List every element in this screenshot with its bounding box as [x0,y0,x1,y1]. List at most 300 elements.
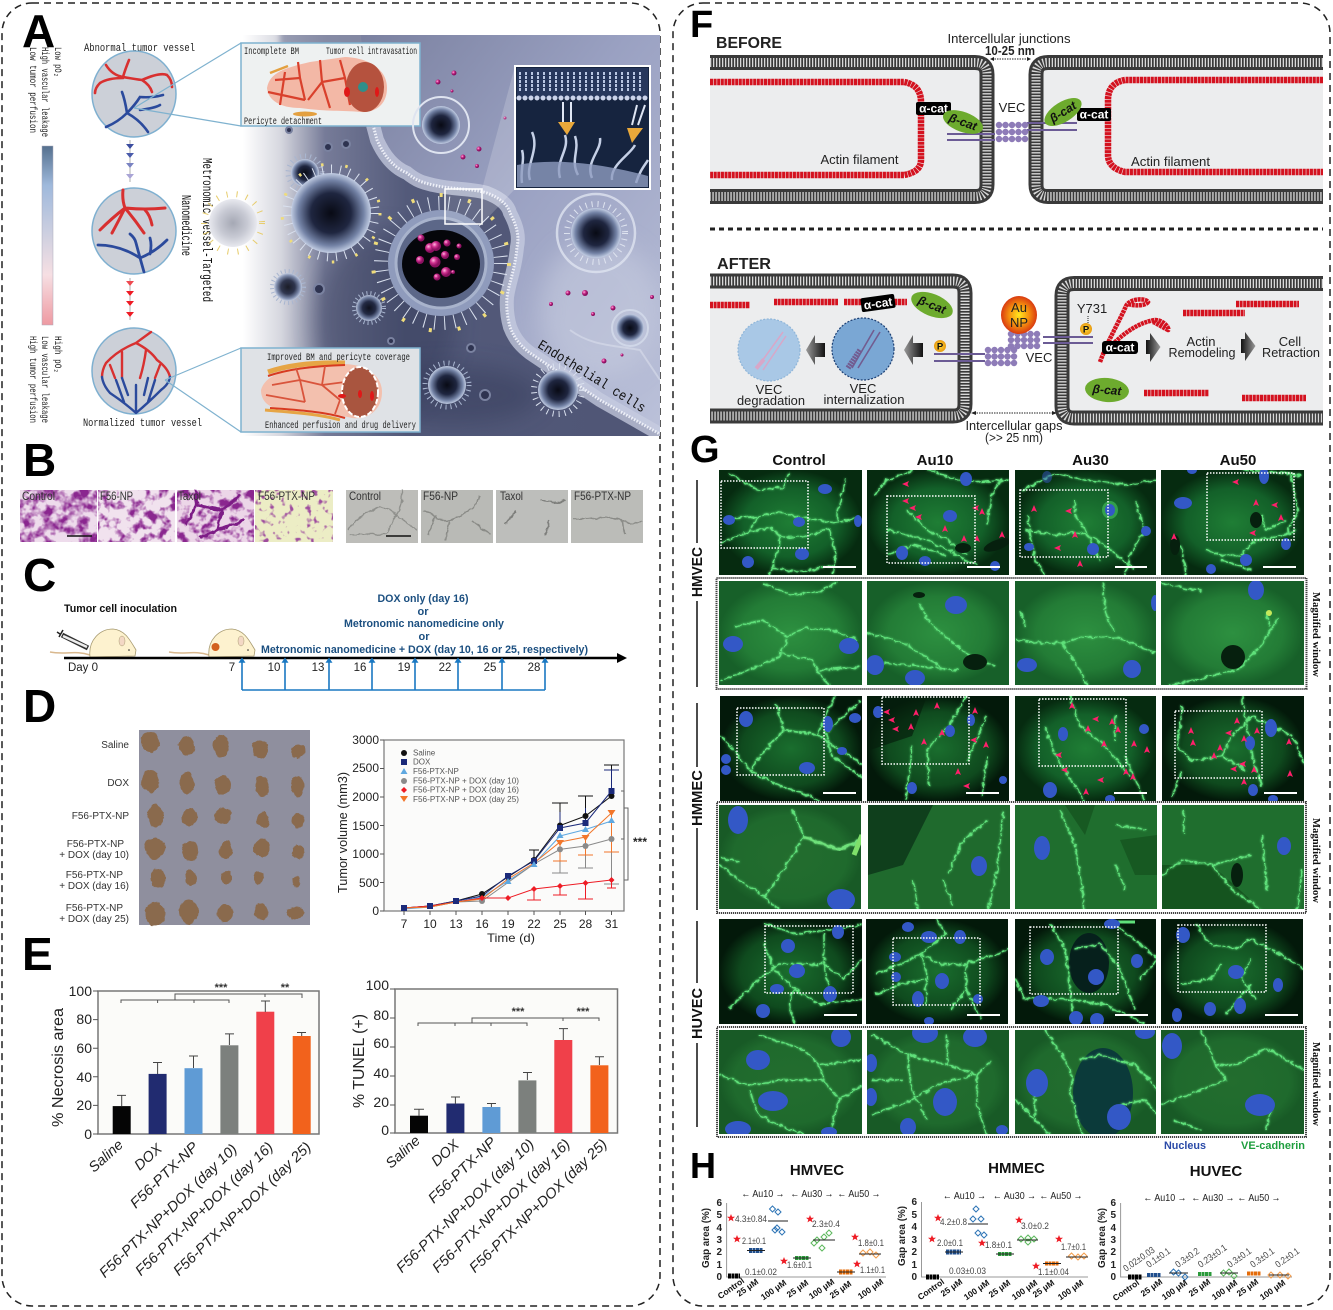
line chart: tumor volume: 19 [501,917,515,931]
scatter: HMMEC: 1 [911,1260,917,1271]
beta-catenin before right [1040,92,1086,132]
callout: abnormal vessel box [241,43,420,128]
micrograph: HMVEC Au30 [1015,470,1156,575]
micrograph: HUVEC Control [719,919,862,1024]
scatter: HUVEC: Control [1111,1277,1141,1303]
scatter: HUVEC: 0.2±0.1 [1273,1246,1302,1270]
arrow: to actin remodeling [1146,333,1160,362]
icon: abnormal vessel circle [92,51,176,137]
bar chart: necrosis area: F56-PTX-NP [127,1139,202,1212]
column headings: Au30 [1072,452,1109,469]
magnified window frame: HMVEC [716,578,1306,689]
bar chart: TUNEL: F56-PTX-NP+DOX (day 25) [467,1136,611,1276]
micrograph: gray Control [346,489,418,543]
micrograph: HUVEC Au30 [1015,919,1156,1024]
micrograph: HUVEC Au50 [1161,919,1303,1024]
bar chart: TUNEL [351,977,618,1276]
callout: abnormal vessel box: Incomplete BM [244,46,299,58]
scatter: HUVEC: 25 μM [1139,1276,1164,1298]
scatter: HUVEC: 25 μM [1187,1276,1212,1298]
scatter: HUVEC: 100 μM [1160,1277,1189,1302]
label: normalized vessel: Normalized tumor vessel [83,418,202,430]
scatter: HMVEC: ← Au30 → [790,1188,834,1200]
cell: after left [710,281,965,416]
magnified: HMMEC Control [719,805,861,909]
vertical condition text: bottom [26,336,63,423]
panel C: dosing timeline [23,549,627,690]
bar chart: necrosis area: 100 [69,983,92,999]
micrograph: gray F56-NP: F56-NP [423,489,458,503]
callout: abnormal vessel box: Tumor cell intravasation [326,46,417,58]
VEC internalization vesicle [824,318,904,407]
arrows: red progression [126,278,134,320]
arrow: internalization [904,335,923,365]
vertical condition text: top: Low tumor perfusion [26,47,38,133]
VEC strand right [1011,334,1093,365]
bar chart: necrosis area: DOX [132,1140,167,1174]
bar chart: TUNEL: DOX [429,1136,464,1170]
beta-catenin after left: β-cat [915,293,949,317]
legend: Saline [413,748,436,758]
bar chart: necrosis area: 40 [76,1069,92,1085]
panel G: VE-cadherin micrographs [689,429,1321,1152]
row label: HUVEC: HUVEC [689,988,706,1039]
line chart: tumor volume: 31 [605,917,618,931]
bar chart: necrosis area: F56-PTX-NP+DOX (day 16) [133,1139,277,1279]
dosing schedule text: Metronomic nanomedicine only [344,618,505,630]
scatter: HMMEC: ← Au30 → [993,1190,1036,1202]
bar chart: necrosis area: *** [215,982,228,994]
scatter: HMMEC: Gap area (%) [897,1206,908,1266]
scatter: HMMEC: 2 [911,1247,917,1258]
scatter: HMVEC: 2 [716,1247,722,1258]
line chart: tumor volume: Tumor volume (mm3) [335,772,350,893]
magnified: HUVEC Au30 [1015,1030,1156,1134]
label: magnified window 3: Magnified window [1310,1042,1321,1127]
scatter: HUVEC: 4 [1110,1223,1116,1234]
scatter: HUVEC: 2 [1110,1247,1116,1258]
scatter: HUVEC: 100 μM [1258,1277,1287,1302]
legend: F56-PTX-NP [413,767,459,776]
heading B: B [23,434,56,486]
nanoparticles in tumor [204,70,654,414]
tumor photo with group labels: DOX [107,778,129,789]
label: actin remodeling: Actin [1187,334,1215,349]
icon: Au nanoparticle: NP [1010,315,1028,330]
beta-catenin after left [907,287,957,323]
vertical condition text: bottom: Low vascular leakage [38,336,50,423]
scatter: HMMEC: 0 [911,1272,917,1283]
panel D: tumor photos and growth curve [23,680,647,945]
dosing schedule text: or [418,631,430,643]
zoom wedge [482,66,515,224]
line chart: tumor volume: 1000 [352,847,379,861]
icon: mouse with tumor [169,629,255,657]
bar chart: TUNEL: F56-PTX-NP+DOX (day 16) [430,1136,574,1276]
label: intercellular gaps: (>> 25 nm) [985,430,1043,445]
scatter: HUVEC [1097,1163,1302,1303]
scatter: HUVEC: 0.3±0.1 [1248,1246,1277,1270]
day labels: Day 0 [68,662,98,674]
beta-catenin after right [1084,376,1130,404]
dosing schedule text: or [418,606,429,618]
scatter: HMMEC: 100 μM [1010,1277,1039,1302]
bar chart: necrosis area: % Necrosis area [50,1008,67,1127]
scatter: HMVEC: 3 [716,1235,722,1246]
alpha-catenin before left: α-cat [919,102,948,116]
heading: after: AFTER [717,256,771,273]
scatter: HUVEC: 0.23±0.1 [1196,1243,1229,1270]
callout: normalized vessel box: Enhanced perfusion and drug delivery [265,420,416,432]
tumor photo with group labels: F56-PTX-NP [67,839,124,850]
legend: F56-PTX-NP + DOX (day 25) [413,795,519,804]
scatter: HMVEC: 1.1±0.1 [860,1265,885,1276]
day labels [68,662,540,674]
scatter: HMMEC: 25 μM [987,1277,1012,1299]
dosing schedule text: Metronomic nanomedicine + DOX (day 10, 16 or 25, respectively) [261,644,588,656]
vertical condition text: bottom: High pO₂ [51,336,63,373]
micrograph: HMMEC Au10 [867,696,1009,801]
tumor photo with group labels [59,730,310,926]
scatter: HMVEC: 100 μM [759,1277,788,1302]
line chart: tumor volume: 2500 [352,761,379,775]
micrograph: HMMEC Au30 [1015,696,1156,801]
bar chart: TUNEL: 40 [373,1065,389,1081]
bar chart: TUNEL: *** [512,1006,525,1018]
scatter: HMMEC: ← Au50 → [1040,1190,1082,1202]
column headings: Au50 [1220,452,1256,469]
bar chart: TUNEL: 20 [373,1094,389,1110]
magnified: HMMEC Au10 [868,805,1010,909]
label: intercellular gaps: Intercellular gaps [966,418,1063,433]
scatter: HMVEC: 2.1±0.1 [742,1236,766,1247]
panel F: junction mechanism [690,4,1323,445]
Y731 phosphorylation: Y731 [1077,301,1107,316]
tumor photo with group labels: F56-PTX-NP [66,870,123,881]
VEC junction complex: VEC [999,100,1025,115]
micrograph: purple F56-PTX-NP [255,489,333,542]
scatter: HMVEC: Control [716,1275,746,1301]
scatter: HMVEC: 100 μM [807,1276,836,1301]
VEC free strand with phosphate [934,340,1016,363]
bar chart: necrosis area: 20 [76,1097,92,1113]
magnified: HMVEC Control [719,581,862,685]
magnified: HMVEC Au50 [1161,581,1304,685]
line chart: tumor volume: Time (d) [487,931,535,945]
bar chart: necrosis area: F56-PTX-NP+DOX (day 25) [171,1139,315,1279]
scatter: HUVEC: 0.02±0.03 [1121,1245,1157,1274]
line chart: tumor volume: *** [633,835,647,849]
scatter: HUVEC: 25 μM [1235,1276,1260,1298]
line chart: tumor volume: 0 [372,904,379,918]
scatter: HMVEC: 1.8±0.1 [858,1238,884,1249]
scatter: HUVEC: 0.1±0.1 [1144,1246,1173,1270]
inset: ligand detail [515,66,650,189]
scatter: HMVEC: 1.6±0.1 [787,1260,812,1271]
micrograph: gray Control: Control [349,489,381,503]
micrograph: HMMEC Control [720,696,862,801]
day labels: 16 [354,662,366,674]
bar chart: necrosis area: Saline [86,1137,127,1176]
VEC junction complex [947,100,1077,140]
small selection square [445,189,482,224]
tumor photo with group labels: F56-PTX-NP [66,903,123,914]
panel E: bar charts [22,928,618,1281]
arrow: to cell retraction [1241,332,1256,361]
column headings: Au10 [917,452,953,469]
scatter: HUVEC: 100 μM [1210,1277,1239,1302]
beta-catenin before left: β-cat [946,110,980,134]
icon: Au nanoparticle: Au [1011,300,1027,315]
row label: HMVEC: HMVEC [689,547,706,597]
vertical title: metronomic nanomedicine [177,158,213,302]
arrow: time axis [64,653,627,663]
scatter: HUVEC: 0 [1110,1272,1116,1283]
icon: normalized vessel circle [92,328,176,414]
micrograph: gray F56-NP [421,489,493,543]
day labels: 25 [484,662,496,674]
VEC strand right: VEC [1026,350,1052,365]
legend: nucleus: Nucleus [1164,1140,1206,1152]
micrograph: gray F56-PTX-NP [571,489,643,543]
micrograph: purple Taxol [177,489,254,542]
VEC degradation vesicle: degradation [737,393,805,408]
label: intercellular gaps [966,411,1063,445]
icon: Au nanoparticle [1001,296,1037,334]
bar chart: TUNEL: 60 [373,1035,389,1051]
bar chart: necrosis area: ** [281,982,290,994]
micrograph: purple F56-NP [98,489,175,542]
scatter: HMMEC: 1.8±0.1 [985,1240,1012,1251]
column headings [772,452,1256,469]
day labels: 22 [439,662,451,674]
vertical title: metronomic nanomedicine: Nanomedicine [177,195,192,256]
tumor photo with group labels: + DOX (day 16) [59,881,129,892]
beta-catenin before left [940,105,986,139]
heading G: G [690,429,720,471]
micrograph: gray F56-PTX-NP: F56-PTX-NP [574,489,631,503]
tumor photo with group labels: + DOX (day 25) [59,914,129,925]
callout: abnormal vessel box: Pericyte detachment [244,116,322,128]
line chart: tumor volume: 500 [359,876,379,890]
label: actin remodeling [1168,334,1236,360]
bar chart: TUNEL: F56-PTX-NP [425,1134,500,1207]
scatter: HMMEC: 25 μM [939,1276,964,1298]
line chart: tumor volume: 25 [553,917,567,931]
bar chart: TUNEL: % TUNEL (+) [351,1014,368,1108]
label: cell retraction [1262,334,1320,360]
label: actin remodeling: Remodeling [1168,345,1236,360]
bar chart: TUNEL: 80 [373,1007,389,1023]
line chart: tumor volume: 7 [401,917,408,931]
arrows: dosing schedule [240,659,547,690]
micrograph: purple Taxol: Taxol [178,489,201,503]
vertical condition text: top: High vascular leakage [38,47,50,137]
day labels: 28 [528,662,540,674]
bar chart: TUNEL: *** [577,1006,590,1018]
cell: before left: Actin filament [820,152,899,167]
alpha-catenin after left: α-cat [863,295,893,312]
legend: F56-PTX-NP + DOX (day 10) [413,776,519,786]
panel A: vessel normalization illustration [22,5,665,437]
scatter: HMMEC: 0.03±0.03 [949,1266,986,1277]
scatter: HUVEC: 5 [1110,1210,1116,1221]
micrograph: purple F56-PTX-NP: F56-PTX-NP [258,489,315,503]
day labels: 7 [229,662,235,674]
heading A: A [22,5,55,57]
magnified: HMMEC Au50 [1162,805,1304,909]
day labels: 19 [398,662,410,674]
scatter: HMVEC: 25 μM [785,1277,810,1299]
scatter: HUVEC: 1 [1110,1260,1116,1271]
scatter: HMVEC: 4.3±0.84 [735,1214,767,1225]
illustration background [250,35,660,436]
cell: before left [710,62,987,196]
scatter: HMMEC: ← Au10 → [943,1190,986,1202]
legend: F56-PTX-NP + DOX (day 16) [413,786,519,794]
magnified: HUVEC Au10 [867,1030,1009,1134]
scatter: HMMEC: 4.2±0.8 [940,1217,967,1228]
scatter: HMVEC: 0.1±0.02 [745,1267,777,1278]
scatter: HUVEC: ← Au30 → [1192,1192,1234,1204]
scatter: HMMEC: 1.7±0.1 [1061,1242,1086,1253]
magnified window frame: HUVEC [717,1027,1306,1137]
vertical condition text: top: Low pO₂ [51,47,62,77]
day labels: 13 [312,662,324,674]
scatter: HMVEC: 5 [716,1210,722,1221]
VEC internalization vesicle: internalization [824,392,904,407]
bar chart: necrosis area: F56-PTX-NP+DOX (day 10) [97,1141,241,1281]
vertical condition text: bottom: High tumor perfusion [26,336,38,423]
magnified: HMVEC Au10 [867,581,1009,685]
label: magnified window 2: Magnified window [1310,818,1321,904]
label: intercellular junctions: 10-25 nm [985,43,1035,58]
bar chart: necrosis area: 60 [76,1040,92,1056]
scatter: HUVEC: 0.3±0.1 [1225,1246,1254,1270]
scatter: HMVEC: 100 μM [856,1276,885,1301]
line chart: tumor volume: 13 [449,917,463,931]
magnified: HUVEC Control [719,1030,862,1134]
scatter: HMVEC [701,1162,886,1302]
bar chart: necrosis area: 0 [84,1126,92,1142]
line chart: tumor volume: 1500 [352,819,379,833]
scatter: HMMEC: Control [916,1276,946,1302]
micrograph: purple F56-NP: F56-NP [100,489,133,503]
scatter: HUVEC: HUVEC [1190,1163,1242,1180]
tumor photo with group labels: Saline [101,740,129,751]
micrograph: gray Taxol: Taxol [500,489,523,503]
legend [400,748,519,804]
panel: left dashed frame [2,3,660,1306]
scatter: HMVEC: HMVEC [790,1162,844,1179]
dosing schedule text [261,593,588,656]
VEC degradation vesicle [737,319,805,408]
scatter: HUVEC: Gap area (%) [1097,1208,1108,1268]
heading D: D [23,680,56,732]
gradient bar [42,146,53,325]
scatter: HMMEC: 4 [911,1222,917,1233]
label: abnormal vessel: Abnormal tumor vessel [84,43,195,55]
label: endothelial cells: Endothelial cells [534,338,648,417]
VEC internalization vesicle: VEC [850,381,876,396]
label: tumor cell inoculation: Tumor cell inoculation [64,603,177,615]
beta-catenin before right: β-cat [1046,98,1080,126]
beta-catenin after right: β-cat [1091,382,1123,398]
scatter: HMVEC: ← Au50 → [838,1188,880,1200]
bar chart: TUNEL: Saline [383,1133,424,1172]
legend: DOX [413,758,431,766]
magnified: HMMEC Au30 [1015,805,1157,909]
scatter: HUVEC: ← Au10 → [1144,1192,1186,1204]
heading: before: BEFORE [716,35,782,52]
scatter: HMVEC: 1 [716,1260,722,1271]
magnified: HMVEC Au30 [1015,581,1156,685]
tumor photo with group labels: F56-PTX-NP [72,811,129,822]
scatter: HMMEC: 5 [911,1210,917,1221]
scatter: HMVEC: 6 [716,1198,722,1209]
callout: normalized vessel box: Improved BM and pericyte coverage [267,352,410,364]
panel H: gap area scatter plots [690,1145,1302,1303]
line chart: tumor volume: 10 [423,917,437,931]
panel B: cell migration and tube formation [20,434,643,543]
bar chart: necrosis area: 80 [76,1011,92,1027]
micrograph: HMVEC Control [719,470,862,575]
label: intercellular junctions: Intercellular junctions [948,31,1071,46]
scatter: HUVEC: ← Au50 → [1238,1192,1280,1204]
scatter: HMMEC [897,1160,1088,1302]
heading F: F [690,4,713,46]
scatter: HMMEC: HMMEC [988,1160,1045,1177]
scatter: HMMEC: 2.0±0.1 [937,1238,963,1249]
scatter: HMVEC: Gap area (%) [701,1208,712,1268]
scatter: HMMEC: 3.0±0.2 [1021,1221,1049,1232]
line chart: tumor volume [335,733,647,945]
cell: before right: Actin filament [1131,154,1210,169]
scatter: HMMEC: 3 [911,1235,917,1246]
bar chart: TUNEL: 0 [381,1122,389,1138]
scatter: HMVEC: ← Au10 → [742,1188,784,1200]
line chart: tumor volume: 2000 [352,790,379,804]
scatter: HUVEC: 6 [1110,1198,1116,1209]
micrograph: HMVEC Au50 [1161,470,1304,575]
heading C: C [23,549,56,601]
day labels: 10 [268,662,280,674]
Y731 phosphorylation [1077,301,1107,336]
label: cell retraction: Cell [1279,334,1301,349]
micrograph: HUVEC Au10 [866,919,1008,1024]
callout connector lines [134,43,241,432]
scatter: HMVEC: 25 μM [828,1278,853,1300]
panel: right dashed frame [673,3,1330,1306]
scatter: HMMEC: 6 [911,1197,917,1208]
arrow: degradation [806,335,825,365]
icon: syringe [57,630,88,648]
magnified window frame: HMMEC [717,802,1306,913]
scatter: HMVEC: 0 [716,1272,722,1283]
scatter: HMMEC: 100 μM [962,1277,991,1302]
micrograph: purple Control [20,489,97,542]
micrograph: HMVEC Au10 [867,470,1009,575]
bar chart: TUNEL: F56-PTX-NP+DOX (day 10) [394,1136,538,1276]
scatter: HUVEC: 3 [1110,1235,1116,1246]
VEC degradation vesicle: VEC [756,382,782,397]
scatter: HMVEC: 25 μM [735,1276,760,1298]
cell: after right [1062,284,1323,418]
magnified: HUVEC Au50 [1161,1030,1304,1134]
arrows: blue progression [126,140,134,182]
callout: normalized vessel box [241,348,420,432]
scatter: HMMEC: 100 μM [1056,1277,1085,1302]
